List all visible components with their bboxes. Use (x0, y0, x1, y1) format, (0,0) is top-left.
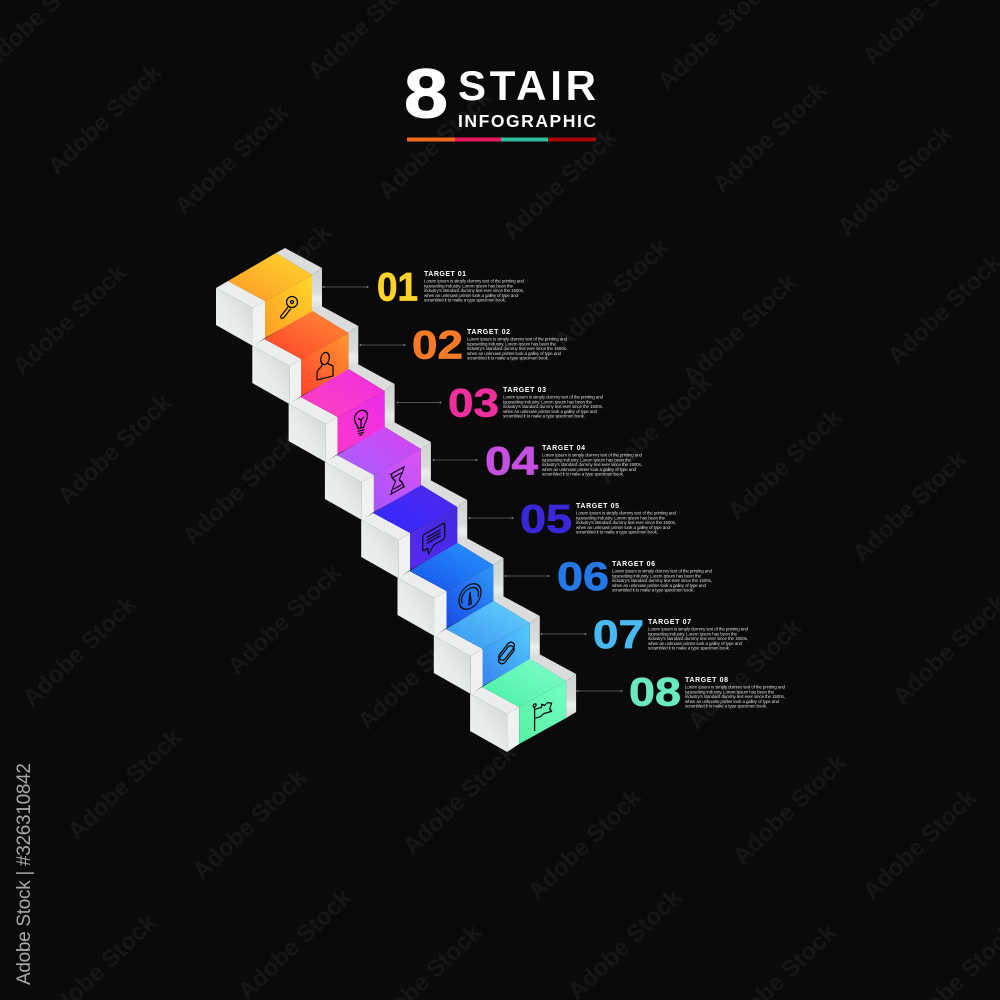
text block: target 07 (648, 619, 748, 651)
number 02: 02 (412, 324, 463, 368)
number 07: 07 (593, 613, 644, 657)
icon: flag (533, 699, 552, 731)
stair step 3 (289, 364, 395, 462)
text block: target 06: typesetting industry. Lorem Ipsum has been the (612, 573, 701, 578)
text block: target 05: TARGET 05 (576, 503, 619, 510)
connector 5 (468, 517, 514, 519)
text block: target 07: TARGET 07 (648, 619, 691, 626)
title (404, 54, 596, 142)
text block: target 02: Lorem Ipsum is simply dummy text of the printing and (467, 336, 567, 342)
text block: target 03 (503, 387, 603, 419)
watermarks: Adobe Stock (728, 748, 852, 870)
connector 8 (576, 690, 622, 692)
watermarks: Adobe Stock (523, 783, 647, 905)
icon: hourglass (390, 467, 404, 494)
text block: target 04: Lorem Ipsum is simply dummy text of the printing and (542, 452, 642, 458)
text block: target 05: when an unknown printer took a galley of type and (576, 525, 670, 530)
text block: target 03: Lorem Ipsum is simply dummy text of the printing and (503, 394, 603, 400)
text block: target 02: typesetting industry. Lorem Ipsum has been the (467, 341, 556, 346)
watermarks: Adobe Stock (63, 723, 187, 845)
text block: target 04 (542, 445, 642, 477)
text block: target 06: when an unknown printer took a galley of type and (612, 583, 706, 588)
text block: target 03: industry's standard dummy text ever since the 1500s, (503, 404, 603, 409)
watermarks: Adobe Stock (550, 233, 674, 355)
watermarks: Adobe Stock (178, 428, 302, 550)
text block: target 07: when an unknown printer took a galley of type and (648, 641, 742, 646)
text block: target 03: typesetting industry. Lorem Ipsum has been the (503, 399, 592, 404)
text block: target 08: industry's standard dummy text ever since the 1500s, (685, 694, 785, 699)
watermarks: Adobe Stock (498, 123, 622, 245)
watermarks: Adobe Stock (833, 119, 957, 241)
text block: target 02: scrambled it to make a type specimen book. (467, 356, 549, 361)
text block: target 06: scrambled it to make a type specimen book. (612, 588, 694, 593)
watermarks: Adobe Stock (398, 738, 522, 860)
text block: target 07: typesetting industry. Lorem Ipsum has been the (648, 631, 737, 636)
connector 1 (322, 286, 368, 288)
connector 2 (360, 344, 406, 346)
text block: target 04: industry's standard dummy text ever since the 1500s, (542, 462, 642, 467)
title: INFOGRAPHIC (458, 111, 596, 131)
watermarks: Adobe Stock (708, 76, 832, 198)
text block: target 03: TARGET 03 (503, 387, 546, 394)
icon: key (280, 296, 298, 318)
text block: target 01: typesetting industry. Lorem Ipsum has been the (424, 283, 513, 288)
stock id caption: Adobe Stock | #326310842 (14, 763, 35, 985)
watermarks: Adobe Stock (353, 613, 477, 735)
connector 3 (396, 402, 442, 404)
text block: target 05 (576, 503, 676, 535)
connector 4 (432, 459, 478, 461)
number 01: 01 (377, 266, 418, 310)
stair step 7 (434, 596, 540, 694)
watermarks: Adobe Stock (223, 558, 347, 680)
text block: target 01: Lorem Ipsum is simply dummy text of the printing and (424, 278, 524, 284)
stair step 2 (252, 306, 358, 404)
text block: target 02 (467, 329, 567, 361)
number 03: 03 (448, 382, 499, 426)
text block: target 01: when an unknown printer took a galley of type and (424, 293, 518, 298)
watermarks: Adobe Stock (43, 58, 167, 180)
text block: target 01 (424, 271, 524, 303)
number 04: 04 (485, 440, 539, 484)
text block: target 05: industry's standard dummy text ever since the 1500s, (576, 520, 676, 525)
watermarks: Adobe Stock (188, 763, 312, 885)
watermarks: Adobe Stock (8, 258, 132, 380)
text block: target 08: Lorem Ipsum is simply dummy text of the printing and (685, 684, 785, 690)
watermarks: Adobe Stock (848, 445, 972, 567)
connector 7 (540, 633, 586, 635)
stair step 5 (361, 480, 467, 578)
text block: target 08: TARGET 08 (685, 677, 728, 684)
title: STAIR (458, 62, 596, 109)
text block: target 05: typesetting industry. Lorem Ipsum has been the (576, 515, 665, 520)
stair step 4 (325, 422, 431, 520)
text block: target 02: when an unknown printer took a galley of type and (467, 351, 561, 356)
number 05: 05 (520, 498, 572, 542)
connector 6 (504, 575, 550, 577)
text block: target 08: when an unknown printer took a galley of type and (685, 699, 779, 704)
text block: target 08: scrambled it to make a type specimen book. (685, 704, 767, 709)
watermarks: Adobe Stock (678, 268, 802, 390)
stair step 8 (470, 654, 576, 752)
text block: target 05: Lorem Ipsum is simply dummy text of the printing and (576, 510, 676, 516)
text block: target 07: scrambled it to make a type specimen book. (648, 646, 730, 651)
text block: target 03: when an unknown printer took a galley of type and (503, 409, 597, 414)
watermarks: Adobe Stock (53, 388, 177, 510)
watermarks: Adobe Stock (858, 783, 982, 905)
watermarks: Adobe Stock (18, 590, 142, 712)
stair step 6 (398, 538, 504, 636)
text block: target 07: Lorem Ipsum is simply dummy text of the printing and (648, 626, 748, 632)
stair step 1 (216, 248, 322, 346)
icon: light bulb (354, 409, 368, 437)
watermarks: Adobe Stock (213, 218, 337, 340)
icon: speech bubble (423, 523, 445, 557)
text block: target 05: scrambled it to make a type specimen book. (576, 530, 658, 535)
icon: gauge (459, 580, 481, 613)
text block: target 01: scrambled it to make a type specimen book. (424, 298, 506, 303)
text block: target 04: typesetting industry. Lorem Ipsum has been the (542, 457, 631, 462)
text block: target 08: typesetting industry. Lorem Ipsum has been the (685, 689, 774, 694)
text block: target 07: industry's standard dummy text ever since the 1500s, (648, 636, 748, 641)
text block: target 04: TARGET 04 (542, 445, 585, 452)
text block: target 04: scrambled it to make a type specimen book. (542, 472, 624, 477)
text block: target 02: industry's standard dummy text ever since the 1500s, (467, 346, 567, 351)
text block: target 01: industry's standard dummy text ever since the 1500s, (424, 288, 524, 293)
watermarks: Adobe Stock (170, 98, 294, 220)
text block: target 02: TARGET 02 (467, 329, 510, 336)
text block: target 06 (612, 561, 712, 593)
text block: target 03: scrambled it to make a type specimen book. (503, 414, 585, 419)
number 08: 08 (629, 670, 681, 714)
watermarks: Adobe Stock (373, 83, 497, 205)
text block: target 08 (685, 677, 785, 709)
text block: target 06: TARGET 06 (612, 561, 655, 568)
number 06: 06 (557, 555, 609, 599)
icon: person (317, 350, 333, 380)
text block: target 04: when an unknown printer took a galley of type and (542, 467, 636, 472)
icon: chain link (497, 641, 516, 665)
watermarks: Adobe Stock (723, 403, 847, 525)
title: 8 (404, 54, 448, 132)
text block: target 01: TARGET 01 (424, 271, 466, 278)
text block: target 06: industry's standard dummy text ever since the 1500s, (612, 578, 712, 583)
watermarks: Adobe Stock (683, 613, 807, 735)
watermarks: Adobe Stock (593, 368, 717, 490)
text block: target 06: Lorem Ipsum is simply dummy text of the printing and (612, 568, 712, 574)
